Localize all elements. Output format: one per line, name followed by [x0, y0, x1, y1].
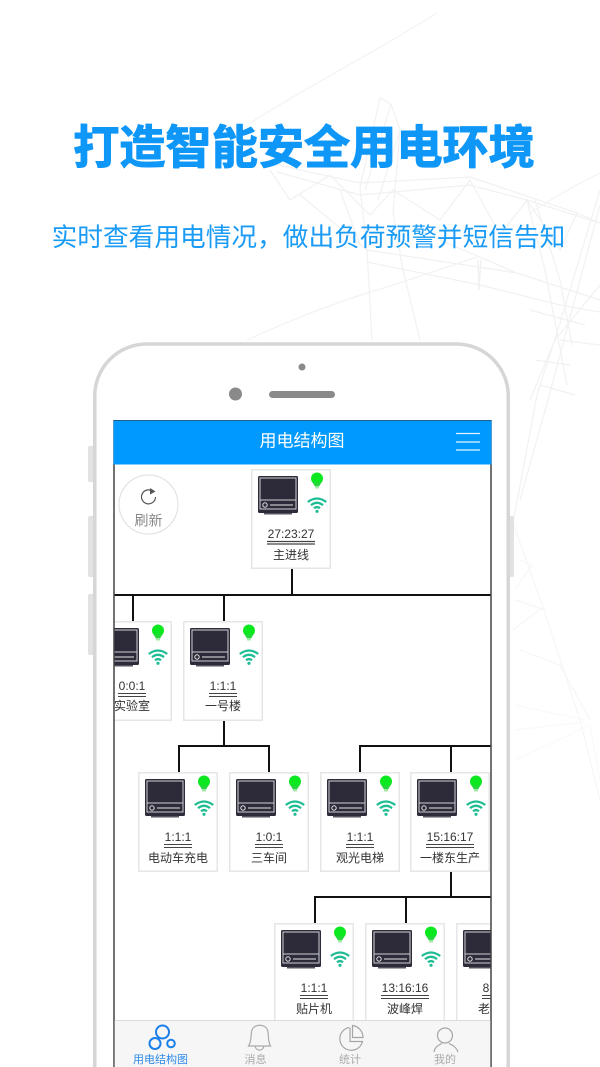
device card: 主进线: 主进线: [273, 548, 309, 562]
device card: 观光电梯: 观光电梯: [336, 851, 384, 865]
tab: 我的: 我的: [434, 1052, 456, 1066]
title: 打造智能安全用电环境: [73, 122, 535, 174]
background: transmission towers: [247, 13, 600, 800]
device card: 主进线: 27:23:27: [268, 527, 315, 541]
device card: 实验室: 实验室: [114, 698, 150, 713]
tab: 用电结构图: [133, 1026, 188, 1066]
header title: 用电结构图: [260, 432, 344, 450]
structure diagram: [114, 469, 490, 1020]
device card: 一楼东生产: 15:16:17: [427, 830, 474, 844]
device card: 电动车充电: 1:1:1: [165, 830, 192, 844]
connector lines: [114, 569, 491, 923]
device card: 观光电梯: [321, 773, 399, 871]
device card: 一号楼: [184, 622, 262, 720]
refresh button: [119, 475, 178, 534]
device card: 波峰焊: 13:16:16: [382, 981, 429, 995]
icon: menu: [456, 434, 480, 450]
bottom tab bar: [115, 1020, 490, 1067]
device card: 一楼东生产: [411, 773, 489, 871]
tab: 消息: 消息: [244, 1052, 266, 1066]
subtitle: 实时查看用电情况，做出负荷预警并短信告知: [52, 223, 565, 252]
phone camera: [229, 388, 242, 400]
device card: 三车间: 1:0:1: [256, 830, 283, 844]
device card: 一号楼: 1:1:1: [210, 679, 237, 693]
device card: 老化 (clipped): 老化房: [478, 1001, 514, 1016]
phone sensor: [298, 364, 306, 370]
header bar: [114, 420, 492, 464]
tab: 消息: [244, 1025, 270, 1066]
screen border: [114, 420, 491, 1067]
device card: 一楼东生产: 一楼东生产: [420, 850, 480, 865]
app screen: [113, 420, 492, 1067]
tab: 我的: [434, 1028, 458, 1066]
device card: 一号楼: 一号楼: [205, 698, 241, 713]
device card: 贴片机: 1:1:1: [301, 981, 328, 995]
phone frame: [88, 344, 514, 1067]
device card: 主进线: [252, 470, 330, 568]
tab: 统计: 统计: [339, 1053, 361, 1066]
device card: 实验室: [114, 621, 172, 721]
device card: 老化 (clipped): [456, 923, 490, 1020]
device card: 电动车充电: 电动车充电: [148, 850, 208, 865]
phone speaker: [269, 391, 335, 398]
device card: 观光电梯: 1:1:1: [347, 830, 374, 844]
device card: 老化 (clipped): 8:8:8: [483, 981, 510, 995]
device card: 三车间: [230, 773, 308, 871]
device card: 贴片机: 贴片机: [296, 1002, 332, 1016]
device card: 波峰焊: [366, 924, 444, 1022]
device card: 波峰焊: 波峰焊: [387, 1001, 423, 1016]
tab: 统计: [339, 1026, 363, 1066]
tab: 用电结构图: 用电结构图: [133, 1052, 188, 1066]
device card: 实验室: 0:0:1: [119, 679, 146, 693]
device card: 三车间: 三车间: [251, 850, 287, 865]
device card: 电动车充电: [139, 773, 217, 871]
refresh button: 刷新: [134, 512, 162, 528]
device card: 贴片机: [275, 924, 353, 1022]
